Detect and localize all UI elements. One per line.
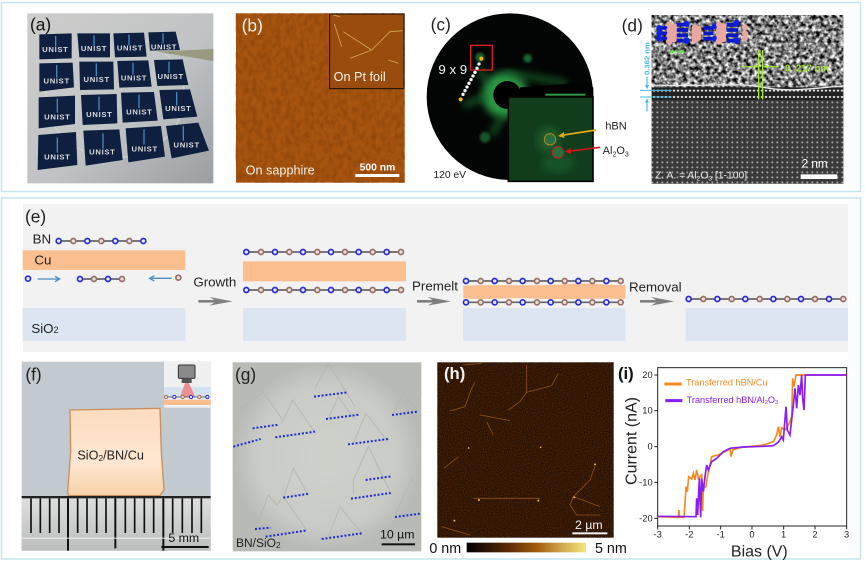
9x9 dots line: [459, 57, 483, 101]
panel g: optical image BN/SiO2: 10 µm: [380, 527, 415, 541]
panel c: LEED pattern: [427, 13, 629, 181]
atomic model: [656, 20, 748, 45]
panel c: LEED pattern: O: [616, 145, 625, 157]
panel a: wafer photo with UNIST tiles: UNIST: [126, 107, 152, 116]
panel c: LEED pattern: Al: [603, 145, 612, 157]
step 3: premelted Cu: [463, 278, 625, 341]
panel b: AFM on sapphire with Pt foil inset: [236, 13, 405, 183]
panel g: optical image BN/SiO2: (g): [235, 364, 256, 384]
legend: 3: [775, 400, 778, 406]
copper sample: [68, 408, 164, 496]
panel a: wafer photo with UNIST tiles: UNIST: [44, 152, 70, 161]
panel d: TEM cross section: O: [700, 170, 708, 181]
panel a: wafer photo with UNIST tiles: UNIST: [84, 75, 110, 84]
panel: bottom frame: [2, 198, 860, 559]
colour bar: [429, 541, 627, 557]
label (a): (a): [30, 15, 51, 35]
0.217 nm annotation: 0. 217 nm: [785, 64, 829, 75]
tick labels: -20: [639, 513, 653, 523]
removal arrow: [629, 280, 682, 306]
growth arrow: [193, 274, 236, 306]
purple curve: hBN/Al2O3: [658, 375, 847, 517]
panel h: AFM image with colour bar: 2 µm: [575, 518, 603, 532]
panel d: TEM cross section: 2: [697, 175, 701, 182]
panel g: optical image BN/SiO2: [233, 362, 421, 551]
tick labels: 20: [642, 370, 653, 380]
legend: O: [768, 395, 775, 405]
step 1: growth on Cu: [23, 206, 185, 341]
0.217 nm annotation: [742, 50, 829, 99]
panel f: BN/Cu sample photo: 5 mm: [168, 531, 199, 545]
panel a: wafer photo with UNIST tiles: UNIST: [132, 144, 158, 153]
panel i: I-V chart: [618, 364, 849, 560]
panel f: BN/Cu sample photo: (f): [25, 364, 42, 384]
panel i: I-V chart: Current (nA): [623, 397, 640, 485]
red selection box: [471, 45, 492, 70]
panel i: I-V chart: -2: [685, 529, 693, 539]
inset: laser microscope schematic: [164, 362, 211, 408]
premelt arrow: Premelt: [412, 278, 458, 293]
panel a: wafer photo with UNIST tiles: UNIST: [86, 110, 112, 119]
panel c: LEED pattern: 2: [612, 151, 616, 158]
panel a: wafer photo with UNIST tiles: UNIST: [44, 112, 70, 121]
panel a: wafer photo with UNIST tiles: UNIST: [81, 44, 107, 53]
blue dash overlays: [233, 392, 420, 539]
axes: [654, 368, 847, 529]
panel i: I-V chart: (i): [618, 364, 634, 383]
step 1: growth on Cu: (e): [25, 206, 46, 226]
copper sample: /BN/Cu: [103, 449, 144, 463]
zoomed inset: [508, 97, 593, 181]
ruler: [22, 496, 211, 551]
step 2: BN on both sides of Cu: [243, 249, 406, 341]
panel a: wafer photo with UNIST tiles: UNIST: [117, 43, 143, 52]
panel i: I-V chart: -1: [717, 529, 725, 539]
panel a: wafer photo with UNIST tiles: UNIST: [158, 72, 184, 81]
tick labels: [639, 370, 653, 523]
panel d: TEM cross section: Z. A. = Al: [655, 170, 697, 181]
triangular BN domains: [238, 363, 421, 537]
step 1: growth on Cu: BN: [33, 232, 51, 247]
legend: 2: [765, 400, 768, 406]
panel c: LEED pattern: hBN: [605, 120, 627, 132]
panel e: transfer process schematic: [23, 204, 848, 352]
panel a: wafer photo with UNIST tiles: UNIST: [121, 73, 147, 82]
panel a: wafer photo with UNIST tiles: UNIST: [44, 76, 70, 85]
panel a: wafer photo with UNIST tiles: UNIST: [165, 104, 191, 113]
panel a: wafer photo with UNIST tiles: UNIST: [174, 140, 200, 149]
panel d: TEM cross section: 3: [708, 175, 712, 182]
panel d: TEM cross section: 2 nm: [802, 158, 828, 171]
green spacing arrow: [670, 50, 684, 53]
tick labels: 10: [642, 406, 653, 416]
panel i: I-V chart: 2: [812, 529, 818, 539]
panel: top row frame: [2, 2, 860, 192]
panel i: I-V chart: 0: [749, 529, 755, 539]
orange curve: hBN/Cu: [658, 375, 847, 517]
panel g: optical image BN/SiO2: 2: [276, 540, 281, 550]
step 4: BN on SiO2: [686, 296, 848, 341]
panel d: TEM cross section: (d): [622, 16, 643, 36]
step 1: growth on Cu: SiO2: [31, 321, 59, 336]
tick labels: 0: [647, 442, 653, 452]
panel c: LEED pattern: 9 x 9: [438, 62, 467, 77]
panel b: AFM on sapphire with Pt foil inset: (b): [242, 16, 263, 36]
arrow to Al2O3: [565, 147, 600, 154]
panel i: I-V chart: 3: [844, 529, 849, 539]
0.362 nm annotation: [640, 42, 672, 111]
panel d: TEM cross section: [1-100]: [712, 170, 747, 181]
legend: Transferred hBN/Al: [687, 395, 765, 405]
panel a: wafer photo with UNIST tiles: UNIST: [42, 45, 68, 54]
legend: [664, 378, 778, 406]
tick labels: -10: [639, 477, 653, 487]
0.362 nm annotation: 0.362 nm: [642, 42, 651, 75]
panel c: LEED pattern: (c): [431, 15, 451, 35]
panel h: AFM image with colour bar: [429, 362, 627, 557]
removal arrow: Removal: [629, 280, 682, 295]
panel i: I-V chart: -3: [654, 529, 662, 539]
step 1: growth on Cu: Cu: [34, 253, 51, 268]
panel b: AFM on sapphire with Pt foil inset: On sapphire: [246, 164, 315, 178]
inset: on Pt foil: On Pt foil: [334, 70, 386, 84]
panel c: LEED pattern: 3: [625, 151, 629, 158]
panel g: optical image BN/SiO2: BN/SiO: [236, 536, 276, 550]
panel b: AFM on sapphire with Pt foil inset: 500 nm: [360, 162, 395, 173]
panel f: BN/Cu sample photo: [22, 362, 211, 551]
colour bar: 0 nm: [429, 541, 461, 557]
copper sample: SiO: [77, 449, 98, 463]
panel i: I-V chart: 1: [781, 529, 786, 539]
legend: Transferred hBN/Cu: [686, 378, 768, 388]
colour bar: 5 nm: [595, 541, 627, 557]
panel h: AFM image with colour bar: (h): [444, 364, 465, 383]
arrow to hBN: [558, 130, 596, 138]
premelt arrow: [412, 278, 458, 306]
panel a: wafer photo with UNIST tiles: UNIST: [89, 148, 115, 157]
panel c: LEED pattern: 120 eV: [433, 170, 466, 181]
growth arrow: Growth: [193, 274, 236, 289]
panel a: wafer photo with UNIST tiles: [27, 13, 213, 183]
inset: on Pt foil: [330, 14, 404, 89]
panel d: TEM cross section: [622, 15, 843, 184]
copper sample: 2: [98, 453, 103, 463]
panel a: wafer photo with UNIST tiles: UNIST: [151, 42, 177, 51]
panel i: I-V chart: Bias (V): [731, 543, 788, 560]
